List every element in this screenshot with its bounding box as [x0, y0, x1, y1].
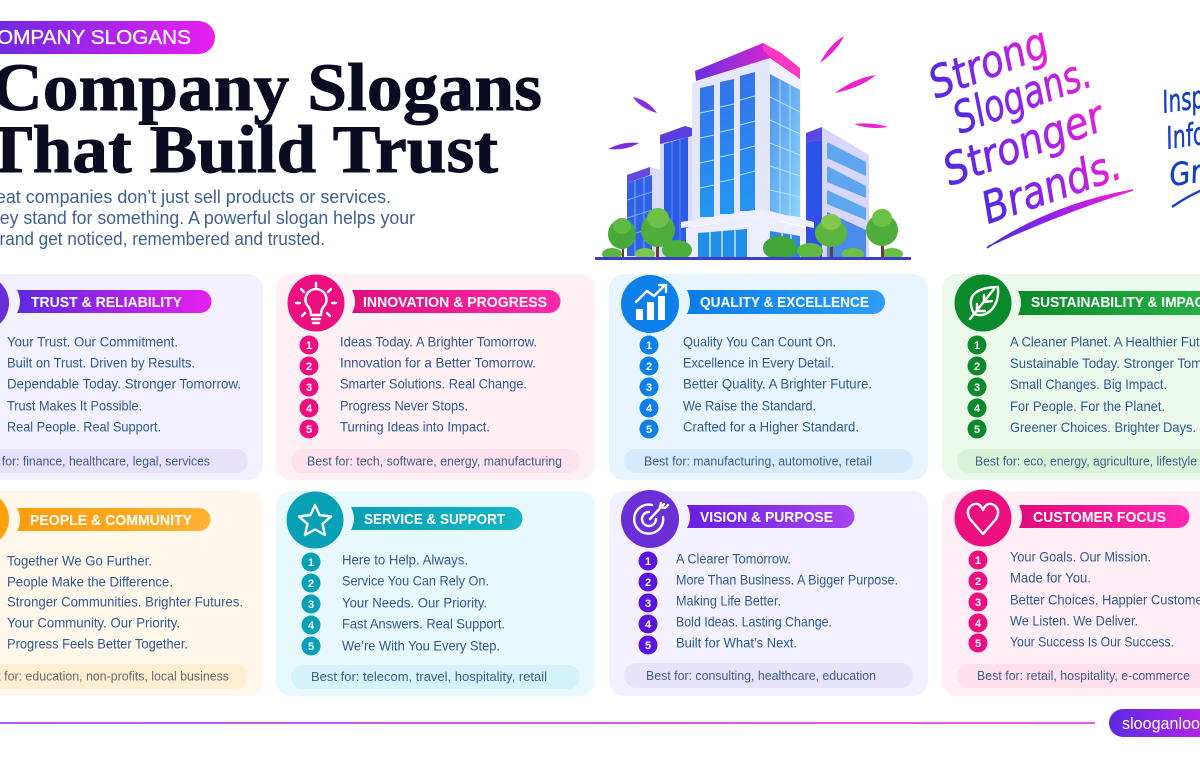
ribbon: vision heading: [687, 505, 855, 528]
best for: vision: Best for: consulting, healthcare, education: [646, 668, 876, 683]
icon: community badge: [0, 491, 9, 547]
slogan list: trust: Trust Makes It Possible.: [7, 398, 142, 414]
slogan list: customer: [968, 548, 1200, 652]
icon: light bulb: [288, 274, 344, 332]
slogan list: vision: 4: [645, 619, 652, 631]
panel: innovation and progress: [276, 274, 595, 480]
slogan list: trust: Real People. Real Support.: [7, 418, 161, 434]
slogan list: sustainability: 5: [974, 424, 980, 436]
slogan list: customer: Your Success Is Our Success.: [1010, 634, 1174, 650]
ribbon: vision heading: VISION & PURPOSE: [700, 509, 833, 526]
handwritten slogan: Strong: [922, 17, 1056, 109]
ribbon: service heading: [351, 507, 522, 530]
best for: quality: [624, 449, 913, 473]
best for: vision: [624, 663, 913, 688]
ribbon: people heading: PEOPLE & COMMUNITY: [30, 512, 192, 529]
slogan list: service: 2: [308, 578, 314, 590]
slogan list: innovation: Smarter Solutions. Real Change.: [340, 376, 527, 392]
best for: customer: Best for: retail, hospitality, e-commerce: [977, 668, 1190, 683]
slogan list: innovation: 1: [306, 340, 312, 352]
best for: quality: Best for: manufacturing, automotive, retail: [644, 454, 872, 468]
icon: trees and bushes: [602, 208, 903, 260]
panel: people and community: [0, 491, 263, 696]
panel: customer focus: [942, 490, 1200, 696]
ribbon: innovation heading: [352, 290, 560, 313]
panel: sustainability and impact: [942, 274, 1200, 480]
slogan list: customer: 4: [975, 618, 982, 630]
slogan list: sustainability: Small Changes. Big Impact.: [1010, 376, 1167, 392]
best for: innovation: [291, 449, 580, 473]
ribbon: sustainability heading: [1018, 291, 1200, 315]
ribbon: trust heading: TRUST & RELIABILITY: [31, 294, 182, 311]
panel: service and support: [276, 491, 595, 696]
illustration: office building: [595, 36, 911, 260]
slogan list: innovation: Innovation for a Better Tomorrow.: [340, 354, 536, 370]
slogan list: vision: [638, 550, 898, 654]
slogan list: vision: Making Life Better.: [676, 592, 781, 608]
icon: target: [621, 490, 679, 548]
ribbon: quality heading: [687, 290, 885, 314]
slogan list: vision: Bold Ideas. Lasting Change.: [676, 614, 832, 630]
slogan list: service: [302, 552, 505, 656]
slogan list: service: 1: [308, 557, 314, 569]
ribbon: service heading: SERVICE & SUPPORT: [364, 511, 505, 528]
ribbon: customer heading: [1019, 505, 1190, 528]
best for: service: [291, 665, 580, 689]
slogan list: people: Progress Feels Better Together.: [7, 636, 188, 652]
slogan list: service: 3: [308, 599, 314, 611]
slogan list: quality: Quality You Can Count On.: [683, 334, 836, 350]
slogan list: vision: Built for What’s Next.: [676, 634, 797, 650]
handwritten slogan: Slogans.: [946, 48, 1098, 144]
icon: far-left building: [627, 167, 660, 258]
ribbon: innovation heading: INNOVATION & PROGRESS: [363, 294, 547, 311]
slogan list: quality: [640, 334, 872, 438]
ribbon: quality heading: QUALITY & EXCELLENCE: [700, 294, 869, 311]
icon: right building: [806, 127, 869, 258]
header badge: [0, 21, 215, 54]
slogan list: innovation: Ideas Today. A Brighter Tomorrow.: [340, 334, 537, 350]
footer brand pill: [1109, 709, 1200, 737]
ground line: [595, 257, 911, 260]
best for: people: [0, 664, 248, 689]
best for: customer: [957, 664, 1200, 688]
panel: trust and reliability: [0, 274, 263, 480]
slogan list: customer: 2: [975, 576, 981, 588]
slogan list: people: Together We Go Further.: [7, 552, 152, 568]
slogan list: customer: 5: [975, 638, 981, 650]
slogan list: sustainability: 1: [974, 340, 980, 352]
slogan list: vision: 5: [645, 640, 651, 652]
slogan list: customer: 3: [975, 597, 981, 609]
best for: trust: [0, 449, 248, 473]
slogan list: sustainability: 4: [974, 403, 981, 415]
intro text: [0, 187, 415, 249]
slogan list: innovation: Progress Never Stops.: [340, 398, 468, 414]
icon: burst rays: [608, 36, 888, 149]
slogan list: people: Stronger Communities. Brighter Futures.: [7, 594, 243, 610]
slogan list: vision: 3: [645, 598, 651, 610]
slogan list: people: People Make the Difference.: [7, 574, 173, 590]
slogan list: quality: Excellence in Every Detail.: [683, 354, 834, 370]
slogan list: innovation: Turning Ideas into Impact.: [340, 418, 490, 434]
ribbon: customer heading: CUSTOMER FOCUS: [1033, 509, 1166, 526]
slogan list: customer: 1: [975, 555, 981, 567]
slogan list: vision: More Than Business. A Bigger Purpose.: [676, 572, 898, 588]
icon: growth chart: [621, 275, 679, 333]
slogan list: quality: 3: [646, 382, 652, 394]
slogan list: sustainability: 2: [974, 361, 980, 373]
icon: mid-left building: [660, 126, 692, 258]
panel: quality and excellence: [609, 274, 928, 480]
slogan list: service: Your Needs. Our Priority.: [342, 594, 487, 610]
slogan list: vision: A Clearer Tomorrow.: [676, 550, 791, 566]
handwritten slogan: Stronger: [936, 90, 1113, 196]
slogan list: quality: 4: [646, 403, 653, 415]
slogan list: service: We’re With You Every Step.: [342, 638, 500, 654]
slogan list: innovation: 3: [306, 382, 312, 394]
title: [0, 49, 542, 187]
slogan list: service: Fast Answers. Real Support.: [342, 616, 505, 632]
slogan list: people: [7, 552, 243, 652]
slogan list: innovation: [300, 334, 537, 438]
slogan list: people: Your Community. Our Priority.: [7, 614, 180, 630]
icon: main tower: [681, 43, 814, 258]
handwritten slogan: Brands.: [975, 139, 1128, 234]
best for: innovation: Best for: tech, software, energy, manufacturing: [307, 454, 562, 468]
slogan list: vision: 2: [645, 577, 651, 589]
slogan list: innovation: 2: [306, 361, 312, 373]
slogan list: sustainability: [968, 334, 1200, 438]
slogan list: customer: Your Goals. Our Mission.: [1010, 548, 1151, 564]
slogan list: service: 5: [308, 641, 314, 653]
handwritten side note: [1160, 75, 1200, 207]
icon: leaf: [954, 274, 1012, 332]
slogan list: service: Here to Help. Always.: [342, 552, 468, 568]
slogan list: trust: Dependable Today. Stronger Tomorrow.: [7, 376, 241, 392]
slogan list: quality: 2: [646, 361, 652, 373]
slogan list: trust: Built on Trust. Driven by Results.: [7, 354, 195, 370]
slogan list: customer: We Listen. We Deliver.: [1010, 612, 1138, 628]
footer rule: [0, 722, 1095, 724]
slogan list: customer: Made for You.: [1010, 570, 1091, 586]
slogan list: quality: We Raise the Standard.: [683, 398, 816, 414]
slogan list: sustainability: 3: [974, 382, 980, 394]
ribbon: people heading: [17, 508, 210, 531]
icon: heart: [954, 490, 1012, 546]
best for: sustainability: [957, 449, 1200, 473]
handwritten slogan: [922, 17, 1133, 248]
slogan list: trust: [7, 334, 241, 434]
slogan list: quality: 1: [646, 340, 652, 352]
slogan list: service: Service You Can Rely On.: [342, 572, 489, 588]
panel: vision and purpose: [609, 490, 928, 696]
slogan list: quality: 5: [646, 424, 652, 436]
slogan list: innovation: 4: [306, 403, 313, 415]
icon: trust badge: [0, 275, 9, 331]
icon: star: [286, 492, 344, 548]
slogan list: innovation: 5: [306, 424, 312, 436]
slogan list: quality: Crafted for a Higher Standard.: [683, 418, 859, 434]
slogan list: quality: Better Quality. A Brighter Future.: [683, 376, 872, 392]
slogan list: trust: Your Trust. Our Commitment.: [7, 334, 178, 350]
slogan list: service: 4: [308, 620, 315, 632]
best for: service: Best for: telecom, travel, hospitality, retail: [311, 669, 547, 684]
slogan list: sustainability: For People. For the Planet.: [1010, 398, 1165, 414]
slogan list: vision: 1: [645, 556, 651, 568]
intro text: brand get noticed, remembered and trusted.: [0, 229, 325, 249]
ribbon: trust heading: [17, 290, 212, 313]
title: Company Slogans: [0, 49, 542, 125]
